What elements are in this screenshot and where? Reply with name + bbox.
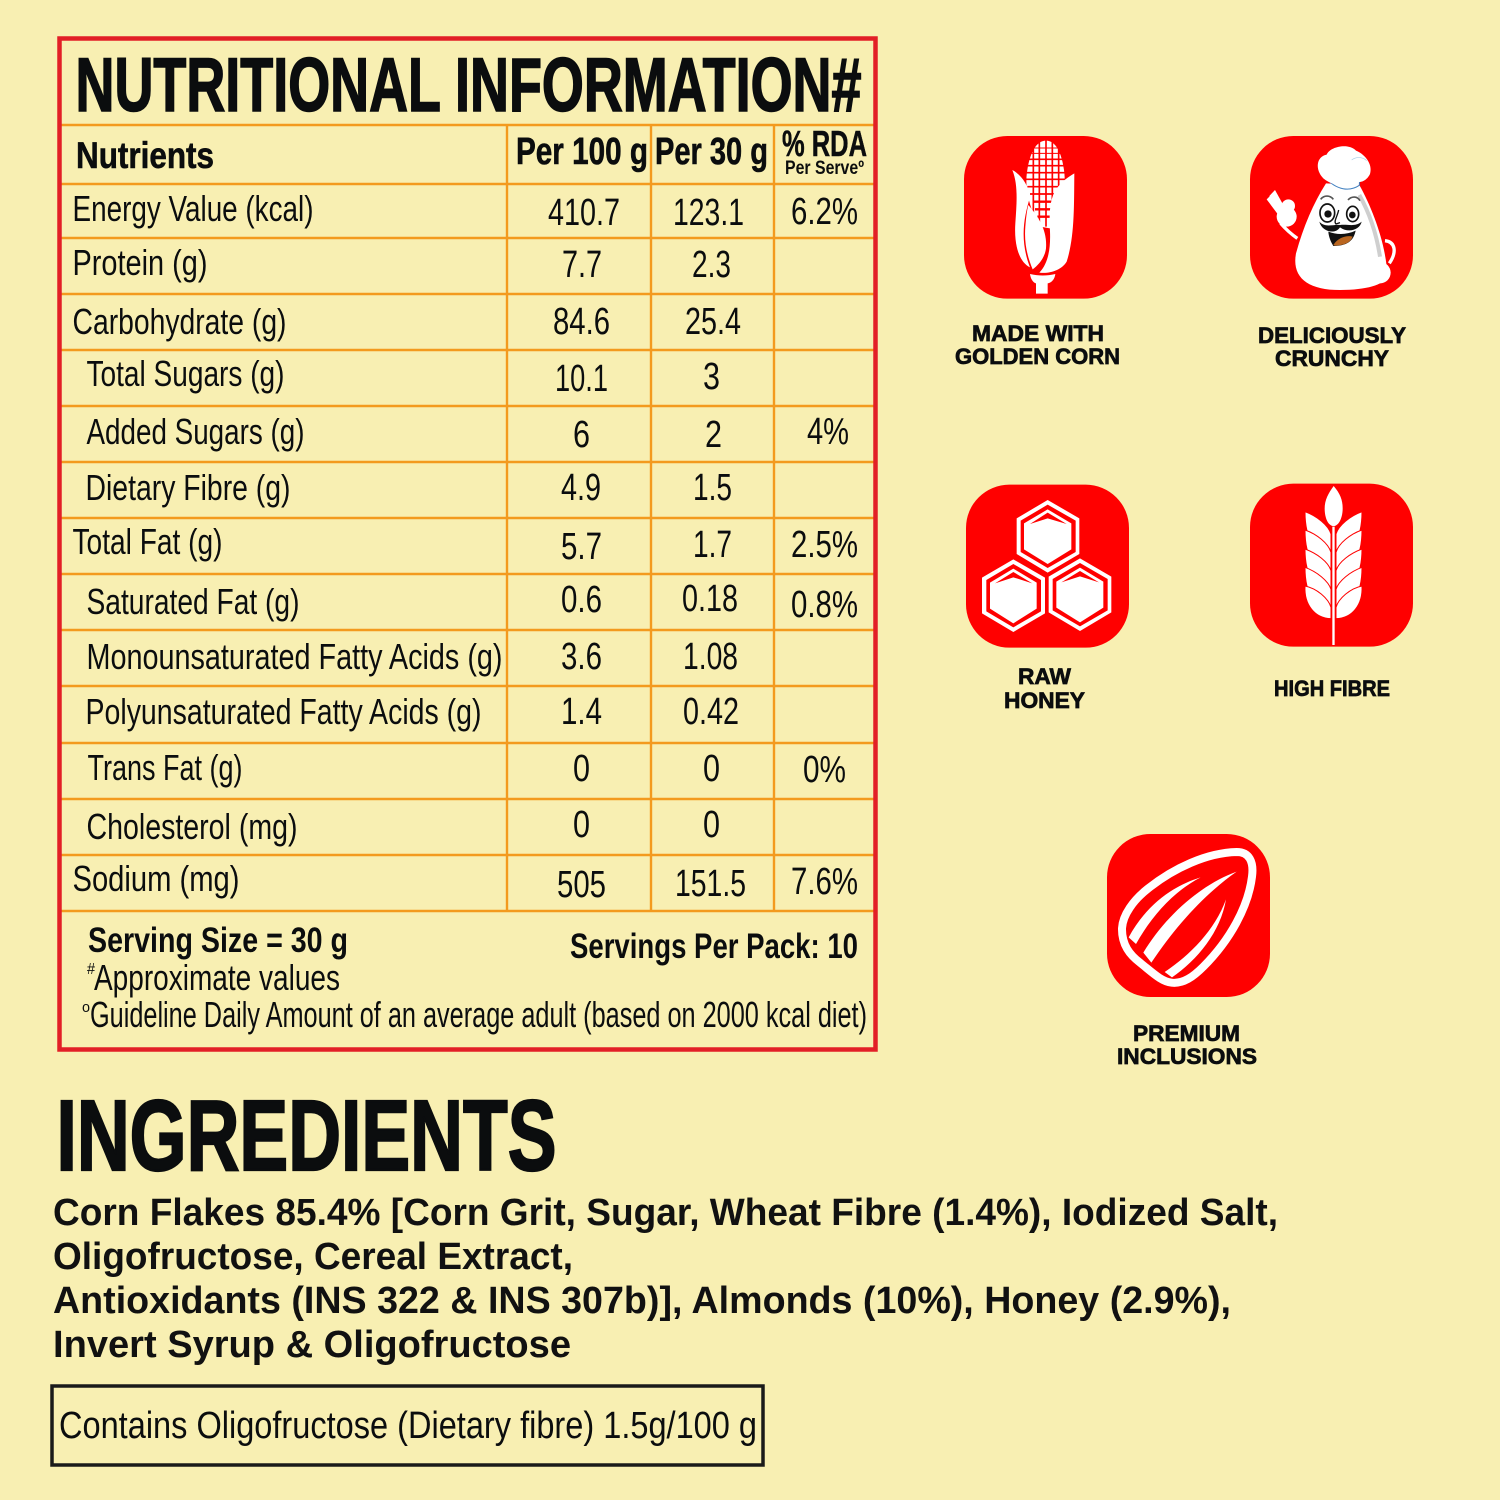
table footer notes: o <box>82 999 90 1016</box>
ingredients text block: Oligofructose, Cereal Extract, <box>53 1236 573 1278</box>
nutrient names: Sodium (mg) <box>72 858 240 899</box>
table footer notes: Approximate values <box>94 957 340 998</box>
table footer notes: Serving Size = 30 g <box>88 921 348 960</box>
table footer notes <box>82 921 867 1035</box>
icon: almond <box>1107 834 1270 997</box>
caption: deliciously crunchy: CRUNCHY <box>1275 346 1389 371</box>
caption: made with golden corn: MADE WITH <box>972 321 1104 346</box>
nutrient names: Protein (g) <box>72 242 208 283</box>
per 100 g values: 4.9 <box>561 467 601 509</box>
icon: wheat <box>1250 484 1413 647</box>
panel: nutritional information table <box>60 38 876 1050</box>
percent RDA values <box>791 191 858 903</box>
per 30 g values: 3 <box>703 356 720 398</box>
percent RDA values: 4% <box>807 411 849 453</box>
nutrient names: Total Sugars (g) <box>86 353 284 394</box>
per 30 g values: 0 <box>703 748 720 790</box>
table border <box>60 38 876 1050</box>
caption: premium inclusions: INCLUSIONS <box>1117 1044 1257 1069</box>
nutrient names: Monounsaturated Fatty Acids (g) <box>86 636 502 677</box>
percent RDA values: 7.6% <box>791 861 858 903</box>
per 30 g values: 0.42 <box>683 691 739 733</box>
percent RDA values: 6.2% <box>791 191 858 233</box>
column headers: Per 100 g <box>516 131 648 173</box>
column headers: Per 30 g <box>655 131 768 173</box>
ingredients text block: Antioxidants (INS 322 & INS 307b)], Almonds (10%), Honey (2.9%), <box>53 1280 1231 1322</box>
per 100 g values: 505 <box>557 864 606 906</box>
caption: premium inclusions: PREMIUM <box>1133 1021 1240 1046</box>
per 30 g values: 2.3 <box>692 244 731 286</box>
per 30 g values: 123.1 <box>673 192 744 234</box>
nutrient names: Trans Fat (g) <box>88 747 242 788</box>
caption: raw honey: HONEY <box>1004 688 1085 713</box>
nutrient names: Carbohydrate (g) <box>72 301 286 342</box>
caption: made with golden corn: GOLDEN CORN <box>955 344 1120 369</box>
per 100 g values: 3.6 <box>561 636 602 678</box>
per 30 g values: 0 <box>703 804 720 846</box>
nutrient names: Added Sugars (g) <box>86 411 304 452</box>
per 30 g values: 2 <box>705 414 722 456</box>
per 30 g values: 1.7 <box>693 524 732 566</box>
column headers: Nutrients <box>76 135 214 176</box>
per 30 g values: 0.18 <box>682 578 738 620</box>
nutrient names: Dietary Fibre (g) <box>86 467 290 508</box>
table footer notes: # <box>87 961 95 978</box>
per 30 g values: 25.4 <box>685 301 741 343</box>
caption: premium inclusions <box>1117 1021 1257 1069</box>
per 100 g values: 0 <box>573 804 590 846</box>
percent RDA values: 2.5% <box>791 524 858 566</box>
column headers: Per Serveº <box>785 158 864 179</box>
icon: honeycomb <box>966 485 1129 648</box>
table title: NUTRITIONAL INFORMATION# <box>76 43 862 128</box>
nutrient names: Cholesterol (mg) <box>86 806 298 847</box>
caption: high fibre: HIGH FIBRE <box>1274 676 1390 701</box>
per 30 g values: 1.08 <box>683 636 738 678</box>
table footer notes: Servings Per Pack: 10 <box>570 927 858 966</box>
caption: deliciously crunchy <box>1258 323 1406 371</box>
per 100 g values: 0 <box>573 748 590 790</box>
per 100 g values: 84.6 <box>553 301 610 343</box>
percent RDA values: 0% <box>803 749 846 791</box>
table grid lines <box>61 125 875 911</box>
table footer notes: Guideline Daily Amount of an average adult (based on 2000 kcal diet) <box>90 994 867 1035</box>
column headers <box>76 123 867 179</box>
per 30 g values <box>673 192 746 905</box>
nutrient names: Energy Value (kcal) <box>72 188 314 229</box>
per 30 g values: 151.5 <box>675 863 746 905</box>
per 100 g values: 0.6 <box>561 579 602 621</box>
per 100 g values: 6 <box>573 414 590 456</box>
ingredients text block: Corn Flakes 85.4% [Corn Grit, Sugar, Wheat Fibre (1.4%), Iodized Salt, <box>53 1192 1278 1234</box>
per 100 g values <box>548 192 620 906</box>
per 100 g values: 7.7 <box>562 244 602 286</box>
icon: corn <box>964 136 1127 299</box>
nutrient names: Saturated Fat (g) <box>86 581 300 622</box>
percent RDA values: 0.8% <box>791 584 858 626</box>
callout: oligofructose content <box>52 1386 763 1465</box>
per 100 g values: 5.7 <box>561 526 602 568</box>
caption: raw honey <box>1004 664 1085 713</box>
nutrient names <box>72 188 502 899</box>
icon: chef mascot <box>1250 136 1413 299</box>
column headers: % RDA <box>782 123 867 164</box>
per 100 g values: 410.7 <box>548 192 620 234</box>
caption: raw honey: RAW <box>1018 664 1071 689</box>
ingredients text block <box>53 1192 1278 1366</box>
per 30 g values: 1.5 <box>693 467 732 509</box>
per 100 g values: 10.1 <box>555 358 608 400</box>
caption: made with golden corn <box>955 321 1120 369</box>
ingredients text block: Invert Syrup & Oligofructose <box>53 1324 571 1366</box>
per 100 g values: 1.4 <box>561 691 602 733</box>
nutrient names: Polyunsaturated Fatty Acids (g) <box>86 691 482 732</box>
heading: ingredients: INGREDIENTS <box>56 1080 556 1192</box>
callout: oligofructose content: Contains Oligofructose (Dietary fibre) 1.5g/100 g <box>59 1405 757 1447</box>
caption: deliciously crunchy: DELICIOUSLY <box>1258 323 1406 348</box>
nutrient names: Total Fat (g) <box>72 521 222 562</box>
